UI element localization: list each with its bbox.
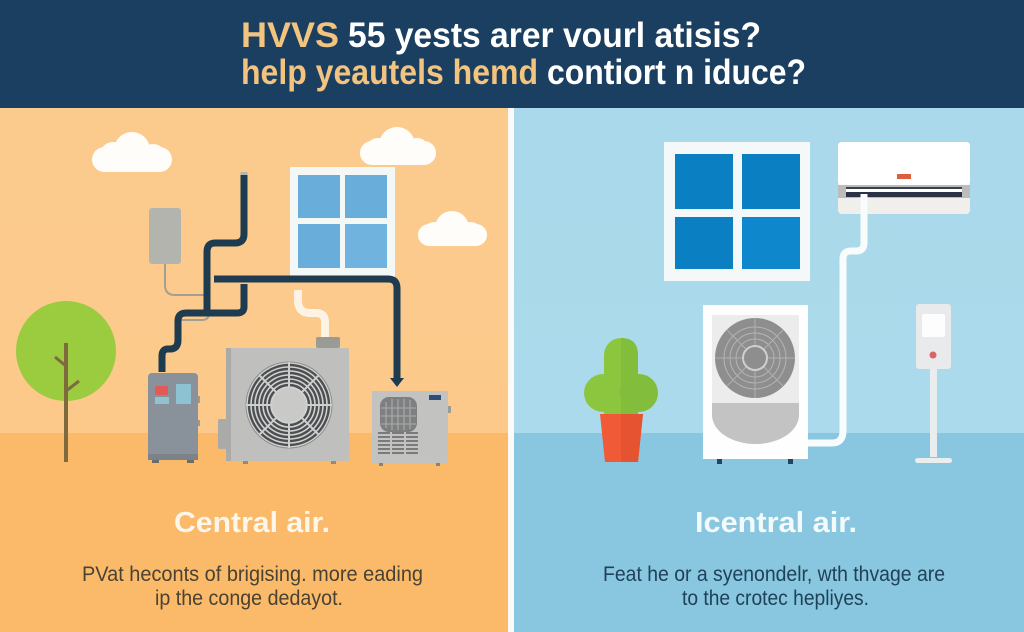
icon: cloud top right — [360, 127, 436, 165]
header band — [0, 0, 1024, 108]
title: HVVS — [241, 16, 339, 55]
panel: central air background — [0, 108, 508, 632]
outdoor condenser unit — [218, 337, 349, 464]
title: 55 yests arer vourl atisis? — [348, 16, 761, 55]
white refrigerant pipe — [808, 194, 864, 443]
ductwork — [162, 172, 397, 378]
window: right panel — [664, 142, 810, 281]
icon: potted plant — [584, 338, 658, 462]
body text: right: to the crotec hepliyes. — [682, 587, 869, 610]
window: left panel — [290, 167, 395, 277]
panel: ductless background — [514, 108, 1024, 632]
body text: right: Feat he or a syenondelr, wth thvage are — [603, 563, 945, 586]
title: contiort n iduce? — [547, 53, 806, 92]
title: help yeautels hemd — [241, 53, 538, 92]
fan — [715, 318, 795, 398]
fan — [246, 362, 332, 448]
heading: left: Central air. — [174, 507, 330, 539]
title — [241, 16, 806, 92]
thermostat on stand — [915, 304, 952, 463]
body text: left — [82, 563, 423, 610]
small indoor unit — [372, 391, 451, 466]
panel divider — [508, 108, 514, 632]
furnace unit — [148, 373, 200, 463]
arrow head — [390, 378, 404, 387]
icon: cloud left — [92, 132, 172, 172]
body text: left: ip the conge dedayot. — [155, 587, 343, 610]
icon: cloud lower right — [418, 211, 487, 246]
icon: tree — [16, 301, 116, 462]
white drain pipe — [298, 290, 325, 340]
body text: left: PVat heconts of brigising. more eading — [82, 563, 423, 586]
wall-mounted air conditioner — [838, 142, 970, 214]
outdoor unit: right panel — [703, 305, 808, 464]
heading: right: Icentral air. — [695, 507, 857, 539]
icon: wall control box — [149, 208, 209, 320]
body text: right — [603, 563, 945, 610]
